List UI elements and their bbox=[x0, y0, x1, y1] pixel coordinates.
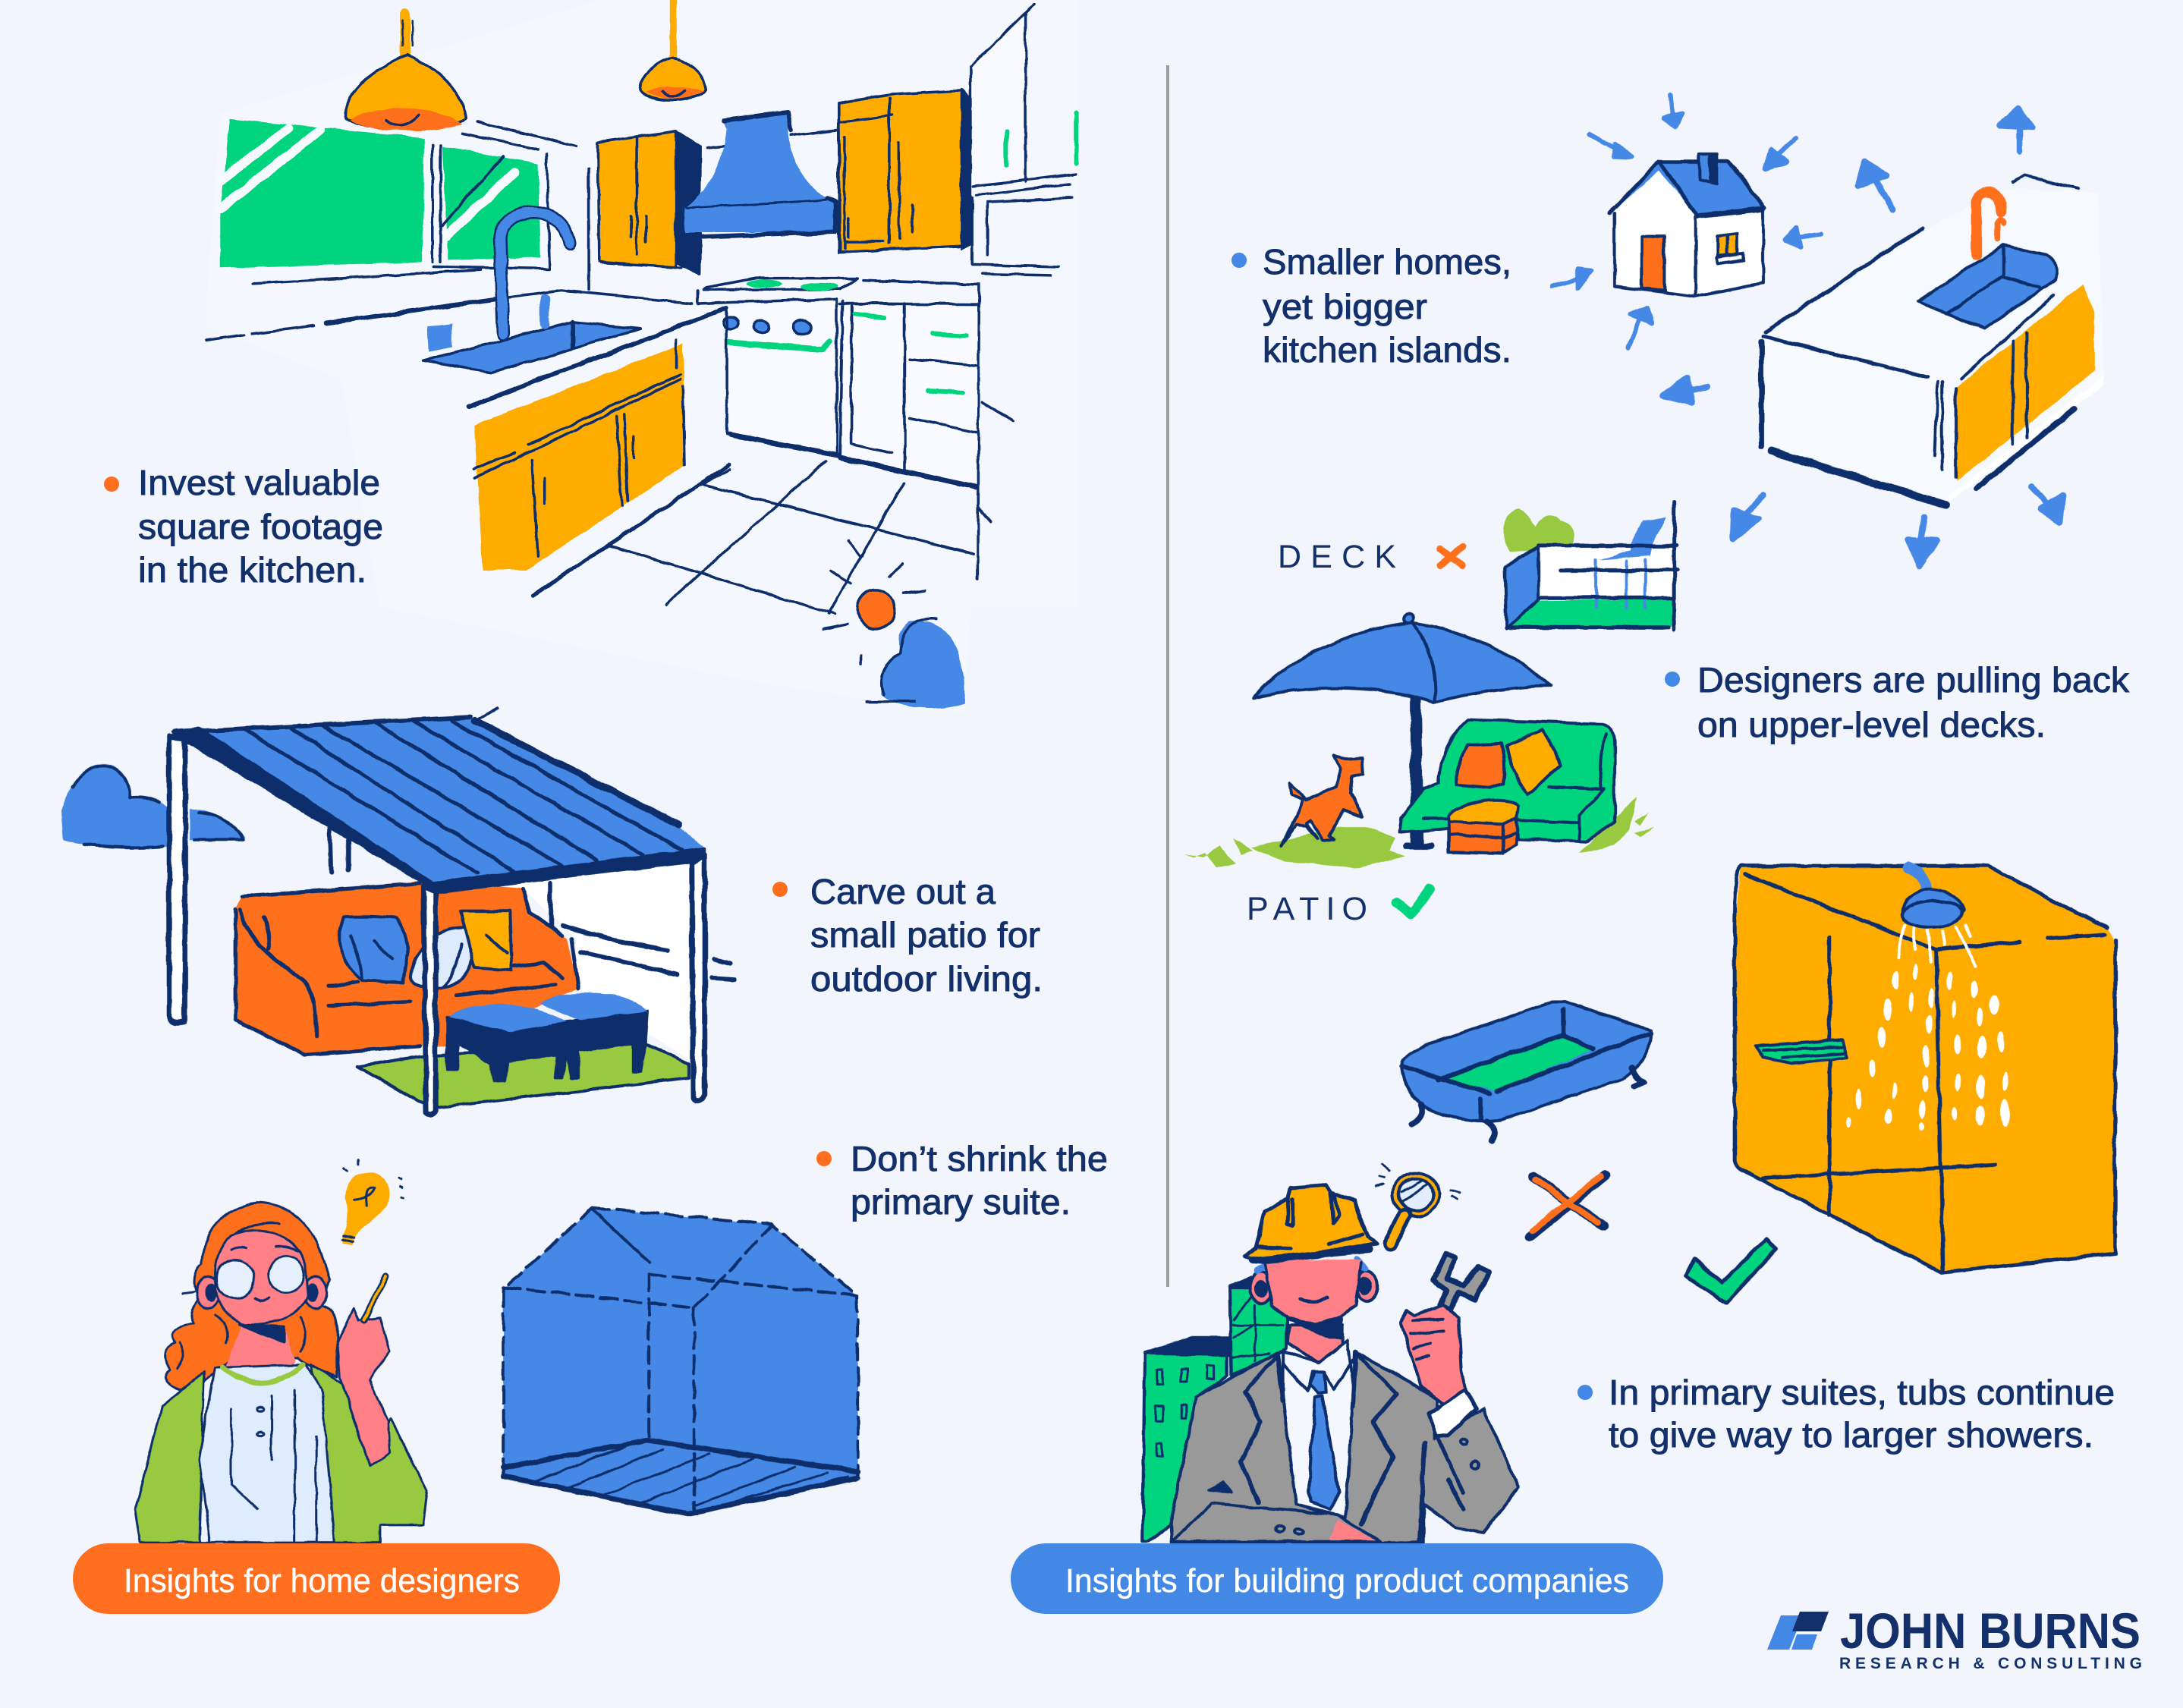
illustration: kitchen bbox=[206, 0, 1077, 708]
pendant lamp left bbox=[345, 14, 465, 131]
hair bbox=[165, 1203, 338, 1392]
small house bbox=[1609, 154, 1765, 296]
ears bbox=[197, 1276, 327, 1308]
glasses bbox=[217, 1256, 304, 1298]
stove and lower cabinets bbox=[697, 278, 1013, 580]
text: patio insight: Carve out a bbox=[810, 872, 996, 911]
pill: home designers: Insights for home designers bbox=[124, 1562, 520, 1599]
logo: JOHN BURNS bbox=[1840, 1603, 2141, 1659]
cardigan bbox=[135, 1364, 427, 1543]
illustration: bathtub and shower bbox=[1402, 866, 2115, 1303]
text: kitchen insight bbox=[104, 463, 383, 590]
text: kitchen islands insight bbox=[1231, 242, 1511, 370]
floor tile lines bbox=[608, 462, 974, 614]
kitchen window bbox=[220, 118, 589, 290]
logo: RESEARCH & CONSULTING bbox=[1839, 1655, 2142, 1672]
text: primary suite insight: Don’t shrink the bbox=[851, 1139, 1108, 1178]
green check mark bbox=[1396, 888, 1430, 914]
text: showers insight: to give way to larger showers. bbox=[1609, 1415, 2093, 1455]
shower head bbox=[1900, 867, 1964, 929]
text: decks insight: on upper-level decks. bbox=[1697, 705, 2046, 744]
pill: building product companies: Insights for building product companies bbox=[1065, 1562, 1629, 1599]
raised arm bbox=[338, 1276, 390, 1465]
text: primary suite insight bbox=[816, 1139, 1108, 1222]
text: primary suite insight: primary suite. bbox=[851, 1182, 1071, 1222]
tie bbox=[1283, 1360, 1353, 1510]
ottoman bbox=[1449, 801, 1518, 854]
neck bbox=[225, 1324, 295, 1386]
green sofa bbox=[1400, 720, 1615, 841]
magnifying glass bbox=[1376, 1163, 1460, 1244]
text: showers insight: In primary suites, tubs continue bbox=[1609, 1373, 2115, 1412]
upper cabinet left bbox=[598, 131, 700, 274]
island sink and faucet bbox=[1918, 192, 2056, 329]
arrows toward house bbox=[1552, 95, 1822, 348]
blouse bbox=[199, 1364, 335, 1543]
text: decks insight: Designers are pulling back bbox=[1697, 660, 2130, 700]
text: kitchen insight: Invest valuable bbox=[138, 463, 380, 502]
cloud bbox=[61, 764, 245, 848]
label: deck: DECK bbox=[1278, 539, 1396, 575]
text: kitchen islands insight: yet bigger bbox=[1263, 287, 1427, 326]
dog bbox=[1281, 756, 1364, 846]
text: decks insight bbox=[1665, 660, 2130, 744]
deck scene bbox=[1504, 502, 1678, 630]
upper cabinet right bbox=[838, 90, 970, 252]
pendant lamp right bbox=[640, 0, 705, 100]
water streams bbox=[1898, 926, 1976, 966]
green check mark bbox=[1685, 1239, 1776, 1303]
illustration: deck and patio comparison bbox=[1183, 502, 1678, 914]
counter and sink bbox=[206, 212, 727, 407]
illustration: woman designer bbox=[135, 1160, 427, 1543]
logo bbox=[1767, 1603, 2142, 1672]
range hood bbox=[684, 112, 837, 237]
orange sofa bbox=[236, 880, 578, 1055]
orange x mark bbox=[1440, 547, 1462, 566]
label: patio: PATIO bbox=[1247, 891, 1367, 927]
illustration: builder bbox=[1143, 1163, 1518, 1543]
towel on shelf bbox=[1756, 1040, 1848, 1063]
light bulb bbox=[343, 1160, 404, 1245]
shirt bbox=[1283, 1341, 1356, 1518]
hair curls bbox=[178, 1292, 306, 1368]
roof bbox=[174, 709, 705, 892]
illustration: covered patio bbox=[61, 709, 734, 1115]
divider bbox=[1166, 65, 1169, 1287]
text: kitchen islands insight: kitchen islands. bbox=[1263, 330, 1511, 370]
base cabinet bbox=[474, 340, 729, 596]
face bbox=[215, 1222, 308, 1342]
umbrella bbox=[1254, 615, 1550, 846]
shower enclosure bbox=[1735, 866, 2115, 1272]
text: patio insight: small patio for bbox=[810, 915, 1040, 955]
water drops bbox=[1846, 964, 2010, 1130]
ball and toy bbox=[823, 563, 965, 708]
patio posts bbox=[169, 737, 705, 1115]
text: patio insight: outdoor living. bbox=[810, 959, 1043, 999]
text: kitchen islands insight: Smaller homes, bbox=[1263, 242, 1511, 282]
text: kitchen insight: in the kitchen. bbox=[138, 550, 366, 590]
illustration: dashed house outline bbox=[504, 1207, 857, 1514]
grass bbox=[1183, 797, 1653, 868]
bathtub bbox=[1402, 1002, 1651, 1142]
hard hat bbox=[1245, 1185, 1376, 1261]
sofa cushions bbox=[339, 911, 511, 988]
head bbox=[1250, 1260, 1377, 1338]
ottomans bbox=[447, 992, 647, 1081]
text: kitchen insight: square footage bbox=[138, 507, 383, 546]
text: patio insight bbox=[772, 872, 1043, 999]
buildings bbox=[1143, 1277, 1287, 1542]
jacket bbox=[1170, 1352, 1518, 1543]
illustration: small house and big island bbox=[1552, 95, 2104, 566]
orange x mark bbox=[1530, 1175, 1606, 1236]
pill: building product companies bbox=[1011, 1543, 1663, 1614]
upper cabinet white bbox=[970, 4, 1077, 275]
island bbox=[1761, 175, 2104, 505]
shirt cuff bbox=[1429, 1389, 1477, 1436]
text: showers insight bbox=[1577, 1373, 2115, 1455]
hand and wrench bbox=[1401, 1254, 1489, 1404]
arrows away from island bbox=[1662, 109, 2062, 566]
rug bbox=[357, 1043, 688, 1107]
neck bbox=[1288, 1326, 1342, 1364]
pill: home designers bbox=[73, 1543, 560, 1614]
